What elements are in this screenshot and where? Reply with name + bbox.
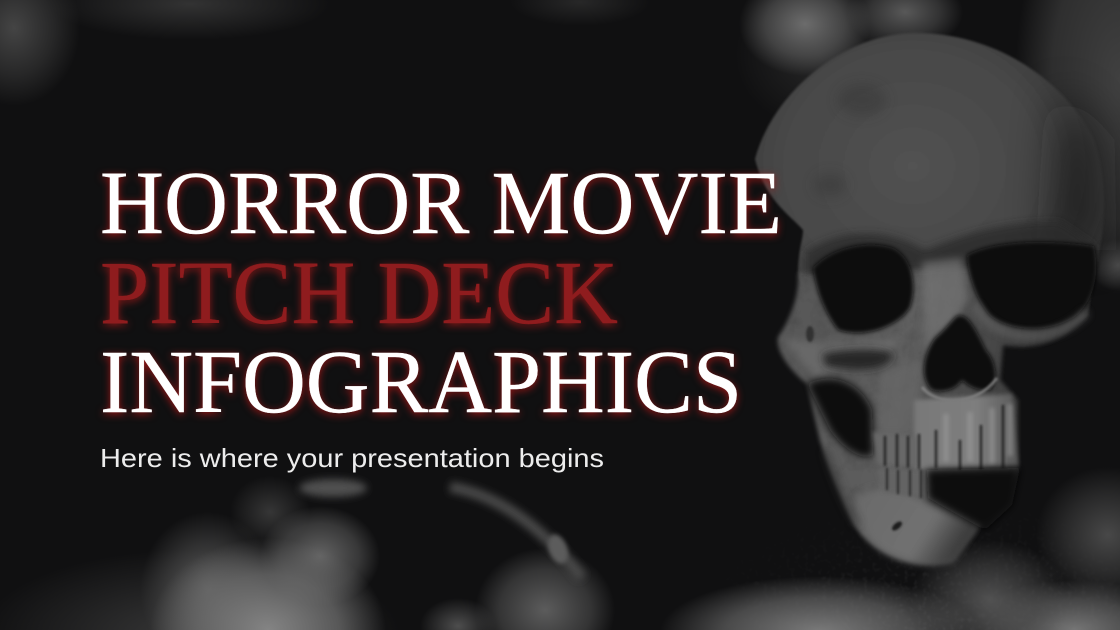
cranium shading bbox=[1050, 90, 1102, 250]
subtitle: Here is where your presentation begins bbox=[100, 443, 604, 473]
bone mottling bbox=[770, 260, 1100, 570]
zygomatic shadow bbox=[823, 350, 893, 370]
nose bridge highlight bbox=[922, 258, 968, 350]
eye socket: right bbox=[967, 242, 1096, 329]
mouth gap bbox=[927, 468, 1020, 530]
title line: PITCH DECK: PITCH DECK bbox=[100, 244, 618, 343]
eye socket: left bbox=[813, 245, 913, 333]
jaw hollow bbox=[807, 379, 873, 457]
title line: INFOGRAPHICS: INFOGRAPHICS bbox=[100, 333, 742, 432]
lower rim of right eye bbox=[975, 305, 1087, 336]
chin bbox=[826, 450, 977, 564]
nose cavity bbox=[924, 315, 996, 391]
lower face bbox=[778, 262, 1090, 564]
maxilla highlight bbox=[876, 360, 922, 436]
brow shadow bbox=[806, 222, 1094, 275]
title line: HORROR MOVIE: HORROR MOVIE bbox=[100, 154, 782, 253]
teeth bbox=[873, 394, 1020, 530]
smoke wisps bbox=[299, 479, 582, 578]
cheekbone highlight bbox=[782, 338, 900, 378]
background photograph: skull bbox=[296, 32, 1118, 588]
skull bbox=[755, 33, 1104, 570]
ground speckle bbox=[864, 572, 926, 588]
cranium bbox=[755, 33, 1104, 350]
